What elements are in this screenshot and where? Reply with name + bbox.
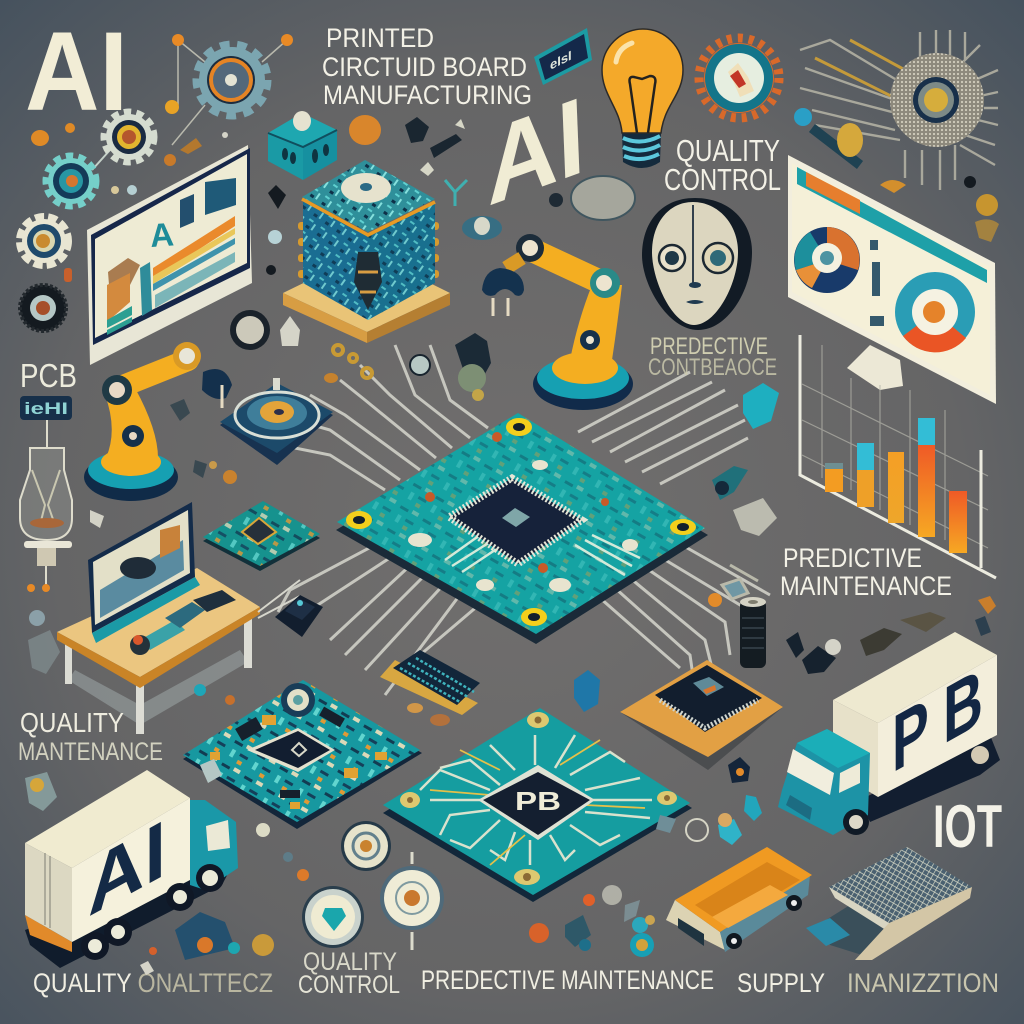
monitor left <box>87 145 252 365</box>
icon: small dark device <box>258 580 323 637</box>
icon: dial plate <box>220 378 333 465</box>
bottom labels: QUALITY ONALTTECZ <box>33 968 273 998</box>
robot arm left <box>84 342 232 501</box>
PCB tag left <box>20 396 72 420</box>
icon: round sensors bottom <box>302 821 444 950</box>
icon: blue tag <box>534 28 592 85</box>
heading: quality control <box>664 133 781 197</box>
bottom labels: INANIZZTION <box>847 968 999 998</box>
bottom labels: SUPPLY <box>737 968 825 998</box>
icon: server cube on platform <box>283 160 450 343</box>
label: quality maintenance left: QUALITY <box>20 707 124 738</box>
mounting holes <box>346 418 696 626</box>
icon: glass flask <box>20 420 72 592</box>
large AI label centre: AI <box>484 73 587 229</box>
bar chart <box>800 335 996 578</box>
label: predictive maintenance right <box>780 543 952 601</box>
bottom labels: PREDECTIVE MAINTENANCE <box>421 965 714 995</box>
truck left AI <box>25 770 238 968</box>
bottom teal circuit board <box>383 708 692 902</box>
bottom labels: CONTROL <box>298 971 400 999</box>
left circuit board <box>183 680 422 829</box>
label: quality maintenance left <box>18 707 163 766</box>
truck right PB <box>778 632 1000 835</box>
gold chip <box>620 660 783 770</box>
icon: battery capacitor <box>740 597 766 668</box>
heading: printed circuit board manufacturing <box>322 23 532 110</box>
icon: cream gear <box>92 113 153 170</box>
icon: quality target <box>699 38 779 118</box>
laptop desk <box>57 502 260 734</box>
label: predictive maintenance right: MAINTENANCE <box>780 571 952 601</box>
heading: predective contbeaoce: PREDECTIVE <box>650 333 768 360</box>
icon: mesh panel <box>806 847 972 960</box>
dark chip module <box>380 650 480 726</box>
title: AI top left: AI <box>25 9 128 134</box>
heading: printed circuit board manufacturing: PRINTED <box>326 23 434 53</box>
heading: printed circuit board manufacturing: CIRCTUID BOARD <box>322 52 527 82</box>
heading: predective contbeaoce <box>648 333 777 381</box>
circuit traces radiating from central board <box>278 345 770 695</box>
pie chart left <box>794 227 860 293</box>
PCB tag left: ieHI <box>24 399 68 418</box>
board components <box>408 432 640 592</box>
heading: quality control: CONTROL <box>664 162 781 197</box>
robot arm centre <box>482 234 633 410</box>
icon: blue tag: eIsI <box>550 48 572 73</box>
label: predictive maintenance right: PREDICTIVE <box>783 543 922 573</box>
icon: robot face mask <box>642 198 752 330</box>
heading: quality control: QUALITY <box>676 133 780 168</box>
donut chart right <box>895 272 975 352</box>
icon: dark disc <box>20 285 66 331</box>
label: PCB: PCB <box>20 357 77 394</box>
icon: circuit disc top right <box>794 30 999 242</box>
icon: teal cube <box>268 111 337 180</box>
truck left AI: AI <box>88 802 166 935</box>
bottom teal circuit board: PB <box>515 786 561 816</box>
bottom labels <box>33 948 999 999</box>
scattered small parts <box>25 115 996 975</box>
icon: large gear with connectors <box>165 34 293 145</box>
icon: flower sensor disc <box>20 217 68 265</box>
monitor right with dashboard <box>788 155 996 404</box>
monitor left: A <box>149 215 175 254</box>
small circuit board <box>203 501 320 571</box>
label: quality maintenance left: MANTENANCE <box>18 738 163 766</box>
icon: teal gear <box>47 157 95 205</box>
icon: light bulb <box>602 29 683 168</box>
bottom labels: QUALITY <box>303 948 397 976</box>
central chip <box>449 478 582 564</box>
truck right PB: P B <box>892 650 983 791</box>
heading: predective contbeaoce: CONTBEAOCE <box>648 354 777 381</box>
icon: orange tray <box>666 847 812 952</box>
heading: printed circuit board manufacturing: MANUFACTURING <box>323 80 532 110</box>
main circuit board <box>336 413 708 644</box>
